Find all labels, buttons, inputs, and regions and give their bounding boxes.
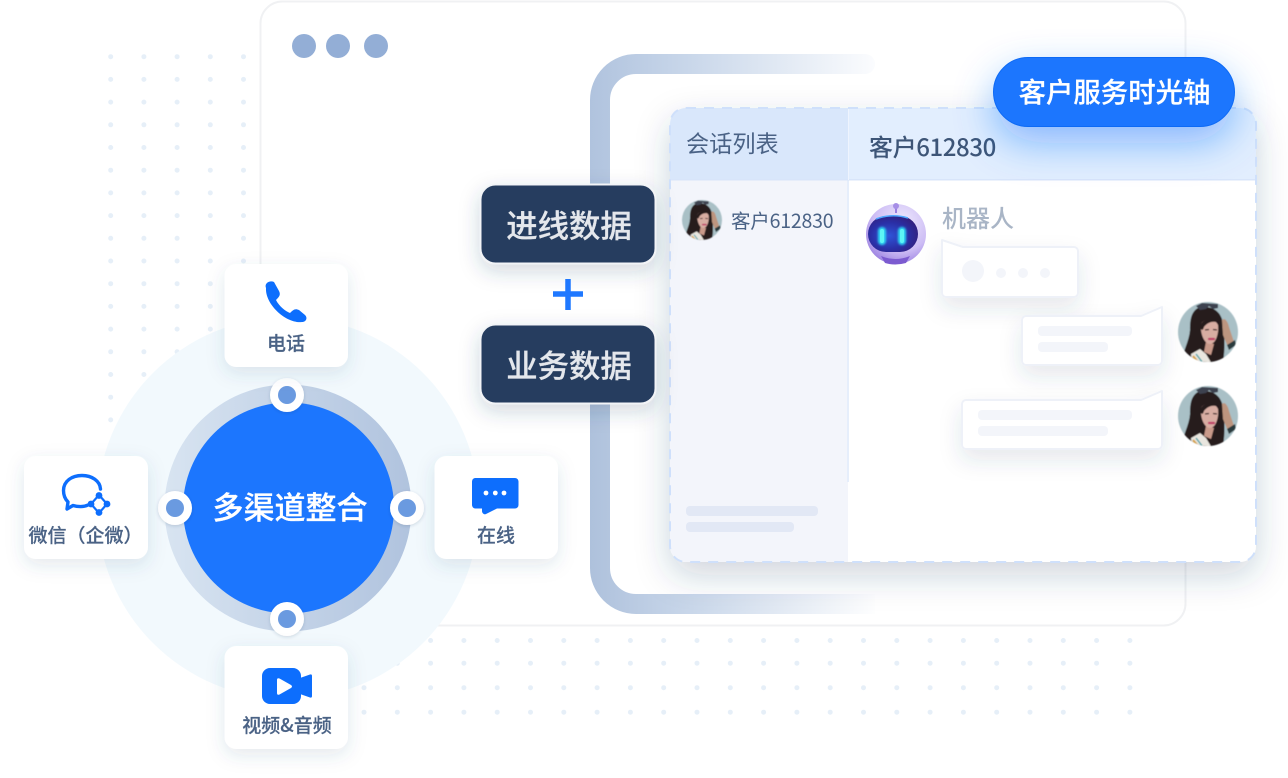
customer message bubble 1 xyxy=(1022,307,1162,365)
timeline pill: 客户服务时光轴 xyxy=(1019,77,1210,108)
list title: 会话列表 xyxy=(686,131,779,157)
background dots: left field xyxy=(111,57,244,425)
channel card: video and audio: 视频&音频 xyxy=(242,711,332,738)
robot name: 机器人 xyxy=(942,206,1014,233)
customer avatar 2 xyxy=(1178,386,1238,448)
channel card: video and audio xyxy=(224,646,348,749)
customer avatar 1 xyxy=(1178,302,1238,364)
channel card: wechat: 微信（企微） xyxy=(28,521,143,548)
hub title: 多渠道整合 xyxy=(212,491,368,526)
icon: phone xyxy=(266,281,306,322)
icon: wecom xyxy=(64,476,110,516)
window control dots xyxy=(292,34,388,58)
channel card: online: 在线 xyxy=(477,521,515,548)
chat title: 客户612830 xyxy=(869,128,996,163)
icon: chat bubble xyxy=(472,478,518,514)
chat header background xyxy=(848,108,1256,180)
icon: video camera xyxy=(262,668,312,704)
conversation panel xyxy=(670,108,1256,562)
channel card: wechat xyxy=(24,456,148,559)
customer message bubble 2 xyxy=(962,391,1162,449)
inbound data box xyxy=(480,184,656,264)
channel card: phone: 电话 xyxy=(267,329,305,356)
list item avatar xyxy=(682,200,722,241)
list item name: 客户612830 xyxy=(731,205,833,234)
list header background xyxy=(670,108,848,180)
robot avatar xyxy=(866,203,926,264)
panel dashed border xyxy=(670,108,1256,562)
robot message bubble xyxy=(942,240,1078,297)
list skeleton bars xyxy=(686,506,818,532)
window frame panel xyxy=(260,2,1186,626)
inbound data box: 进线数据 xyxy=(506,209,632,244)
hub nodes xyxy=(158,378,424,636)
channel card: phone xyxy=(224,264,348,367)
timeline pill xyxy=(994,58,1234,126)
background dots: bottom field xyxy=(364,640,1132,712)
plus sign xyxy=(553,279,583,310)
business data box xyxy=(480,324,656,404)
connecting bracket xyxy=(600,64,875,604)
multi-channel hub xyxy=(97,317,479,699)
conversation list column xyxy=(670,180,848,562)
channel card: online xyxy=(434,456,558,559)
business data box: 业务数据 xyxy=(506,349,632,384)
